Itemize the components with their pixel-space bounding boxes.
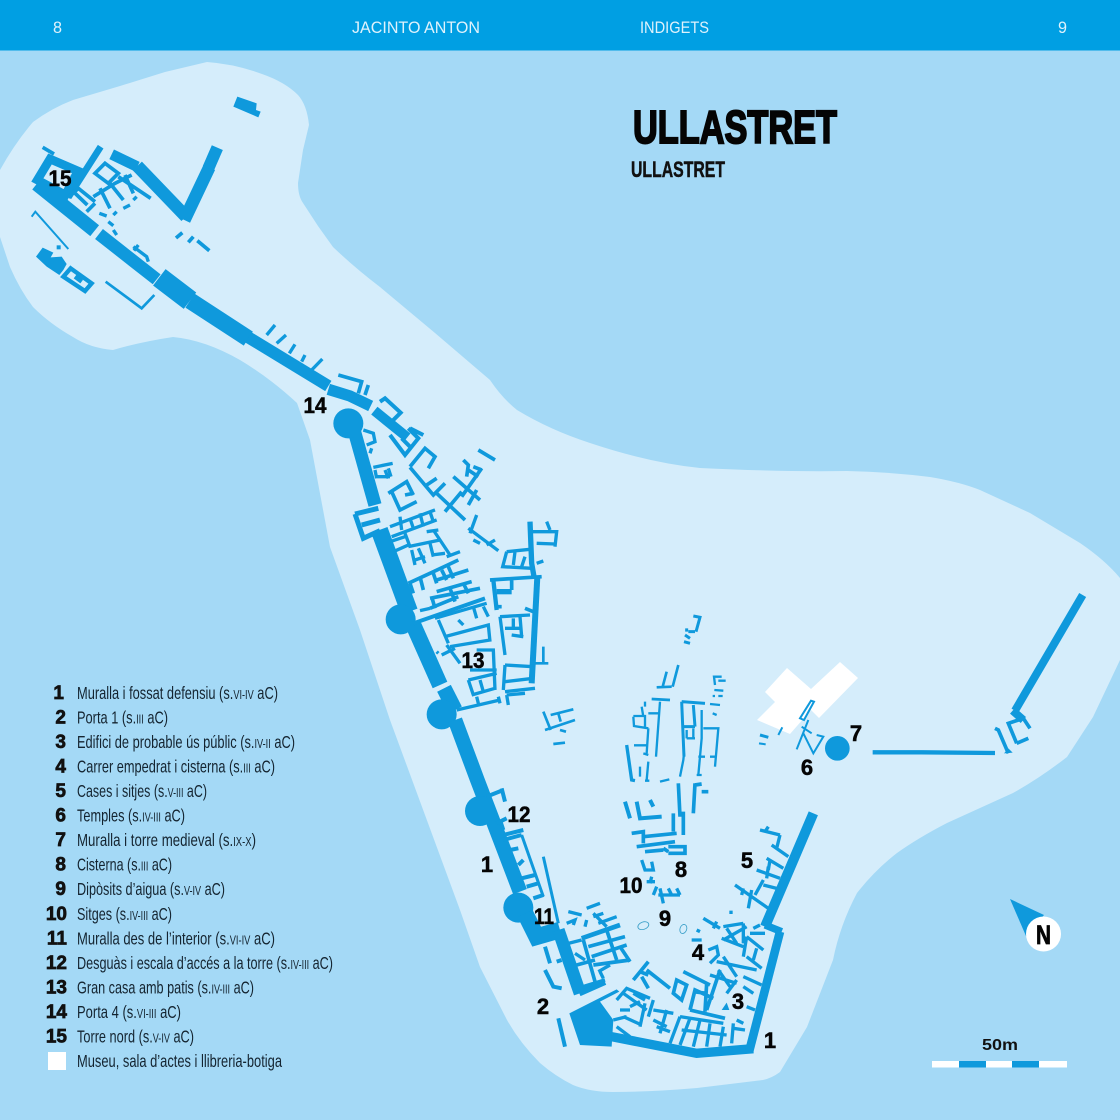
map number labels	[48, 166, 862, 1053]
legend: Cisterna (s.III aC)	[77, 855, 172, 875]
legend: Dipòsits d’aigua (s.V-IV aC)	[77, 879, 225, 899]
scale bar	[932, 1037, 1067, 1068]
map number labels: 1	[764, 1028, 776, 1053]
legend: 4	[55, 757, 66, 778]
legend: Muralla i torre medieval (s.IX-X)	[77, 830, 256, 850]
legend: Porta 4 (s.VI-III aC)	[77, 1002, 181, 1022]
icon: north arrow	[1010, 899, 1061, 952]
legend: Porta 1 (s.III aC)	[77, 708, 168, 728]
legend: 7	[55, 830, 66, 851]
map number labels: 1	[481, 852, 493, 877]
map number labels: 5	[741, 848, 753, 873]
icon: north arrow: N	[1036, 920, 1051, 950]
legend: 3	[55, 732, 66, 753]
legend: 6	[55, 806, 66, 827]
legend	[46, 683, 333, 1071]
legend: Muralla des de l’interior (s.VI-IV aC)	[77, 928, 275, 948]
header bar: 9	[1058, 18, 1067, 37]
legend: Museu, sala d’actes i llibreria-botiga	[77, 1051, 282, 1071]
legend: 12	[46, 953, 67, 974]
legend: Carrer empedrat i cisterna (s.III aC)	[77, 757, 275, 777]
legend: Desguàs i escala d’accés a la torre (s.IV-III aC)	[77, 953, 333, 973]
legend: Cases i sitjes (s.V-III aC)	[77, 781, 207, 801]
header bar	[0, 0, 1120, 50]
map number labels: 9	[659, 906, 671, 931]
north sector: tower and walls	[32, 97, 368, 395]
legend: Muralla i fossat defensiu (s.VI-IV aC)	[77, 683, 278, 703]
map number labels: 10	[620, 873, 642, 898]
map number labels: 4	[692, 940, 705, 965]
map number labels: 14	[304, 393, 327, 418]
map number labels: 11	[534, 904, 554, 929]
legend: Edifici de probable ús públic (s.IV-II aC)	[77, 732, 295, 752]
title: ULLASTRET	[633, 101, 837, 153]
subtitle: ULLASTRET	[631, 157, 725, 182]
south sector: walls, gate and houses	[455, 720, 813, 1053]
header bar: JACINTO ANTON	[352, 18, 480, 37]
legend: 5	[55, 781, 66, 802]
west wall: towers and houses	[328, 389, 557, 729]
map number labels: 12	[508, 802, 530, 827]
legend: 14	[46, 1002, 67, 1023]
legend: Sitges (s.IV-III aC)	[77, 904, 172, 924]
legend: 2	[55, 708, 66, 728]
legend: 13	[46, 977, 67, 998]
legend: 10	[46, 904, 67, 925]
header bar: 8	[53, 18, 62, 37]
legend: Gran casa amb patis (s.IV-III aC)	[77, 977, 254, 997]
legend: 9	[55, 879, 66, 900]
map number labels: 8	[675, 857, 687, 882]
legend: Temples (s.IV-III aC)	[77, 806, 185, 826]
east medieval wall	[873, 595, 1083, 753]
central sector: houses and temples	[543, 616, 850, 782]
legend: Torre nord (s.V-IV aC)	[77, 1026, 194, 1046]
map number labels: 15	[48, 166, 72, 191]
map number labels: 3	[732, 989, 744, 1014]
map number labels: 7	[850, 721, 862, 746]
legend: 15	[46, 1026, 67, 1047]
legend: 11	[47, 928, 67, 949]
legend: 8	[55, 855, 66, 876]
museum building	[757, 662, 858, 734]
title	[631, 101, 837, 182]
scale bar: 50m	[982, 1037, 1018, 1054]
legend: 1	[53, 683, 64, 704]
map number labels: 6	[801, 755, 813, 780]
header bar: INDIGETS	[640, 18, 709, 37]
map number labels: 13	[462, 648, 484, 673]
map number labels: 2	[537, 994, 549, 1019]
